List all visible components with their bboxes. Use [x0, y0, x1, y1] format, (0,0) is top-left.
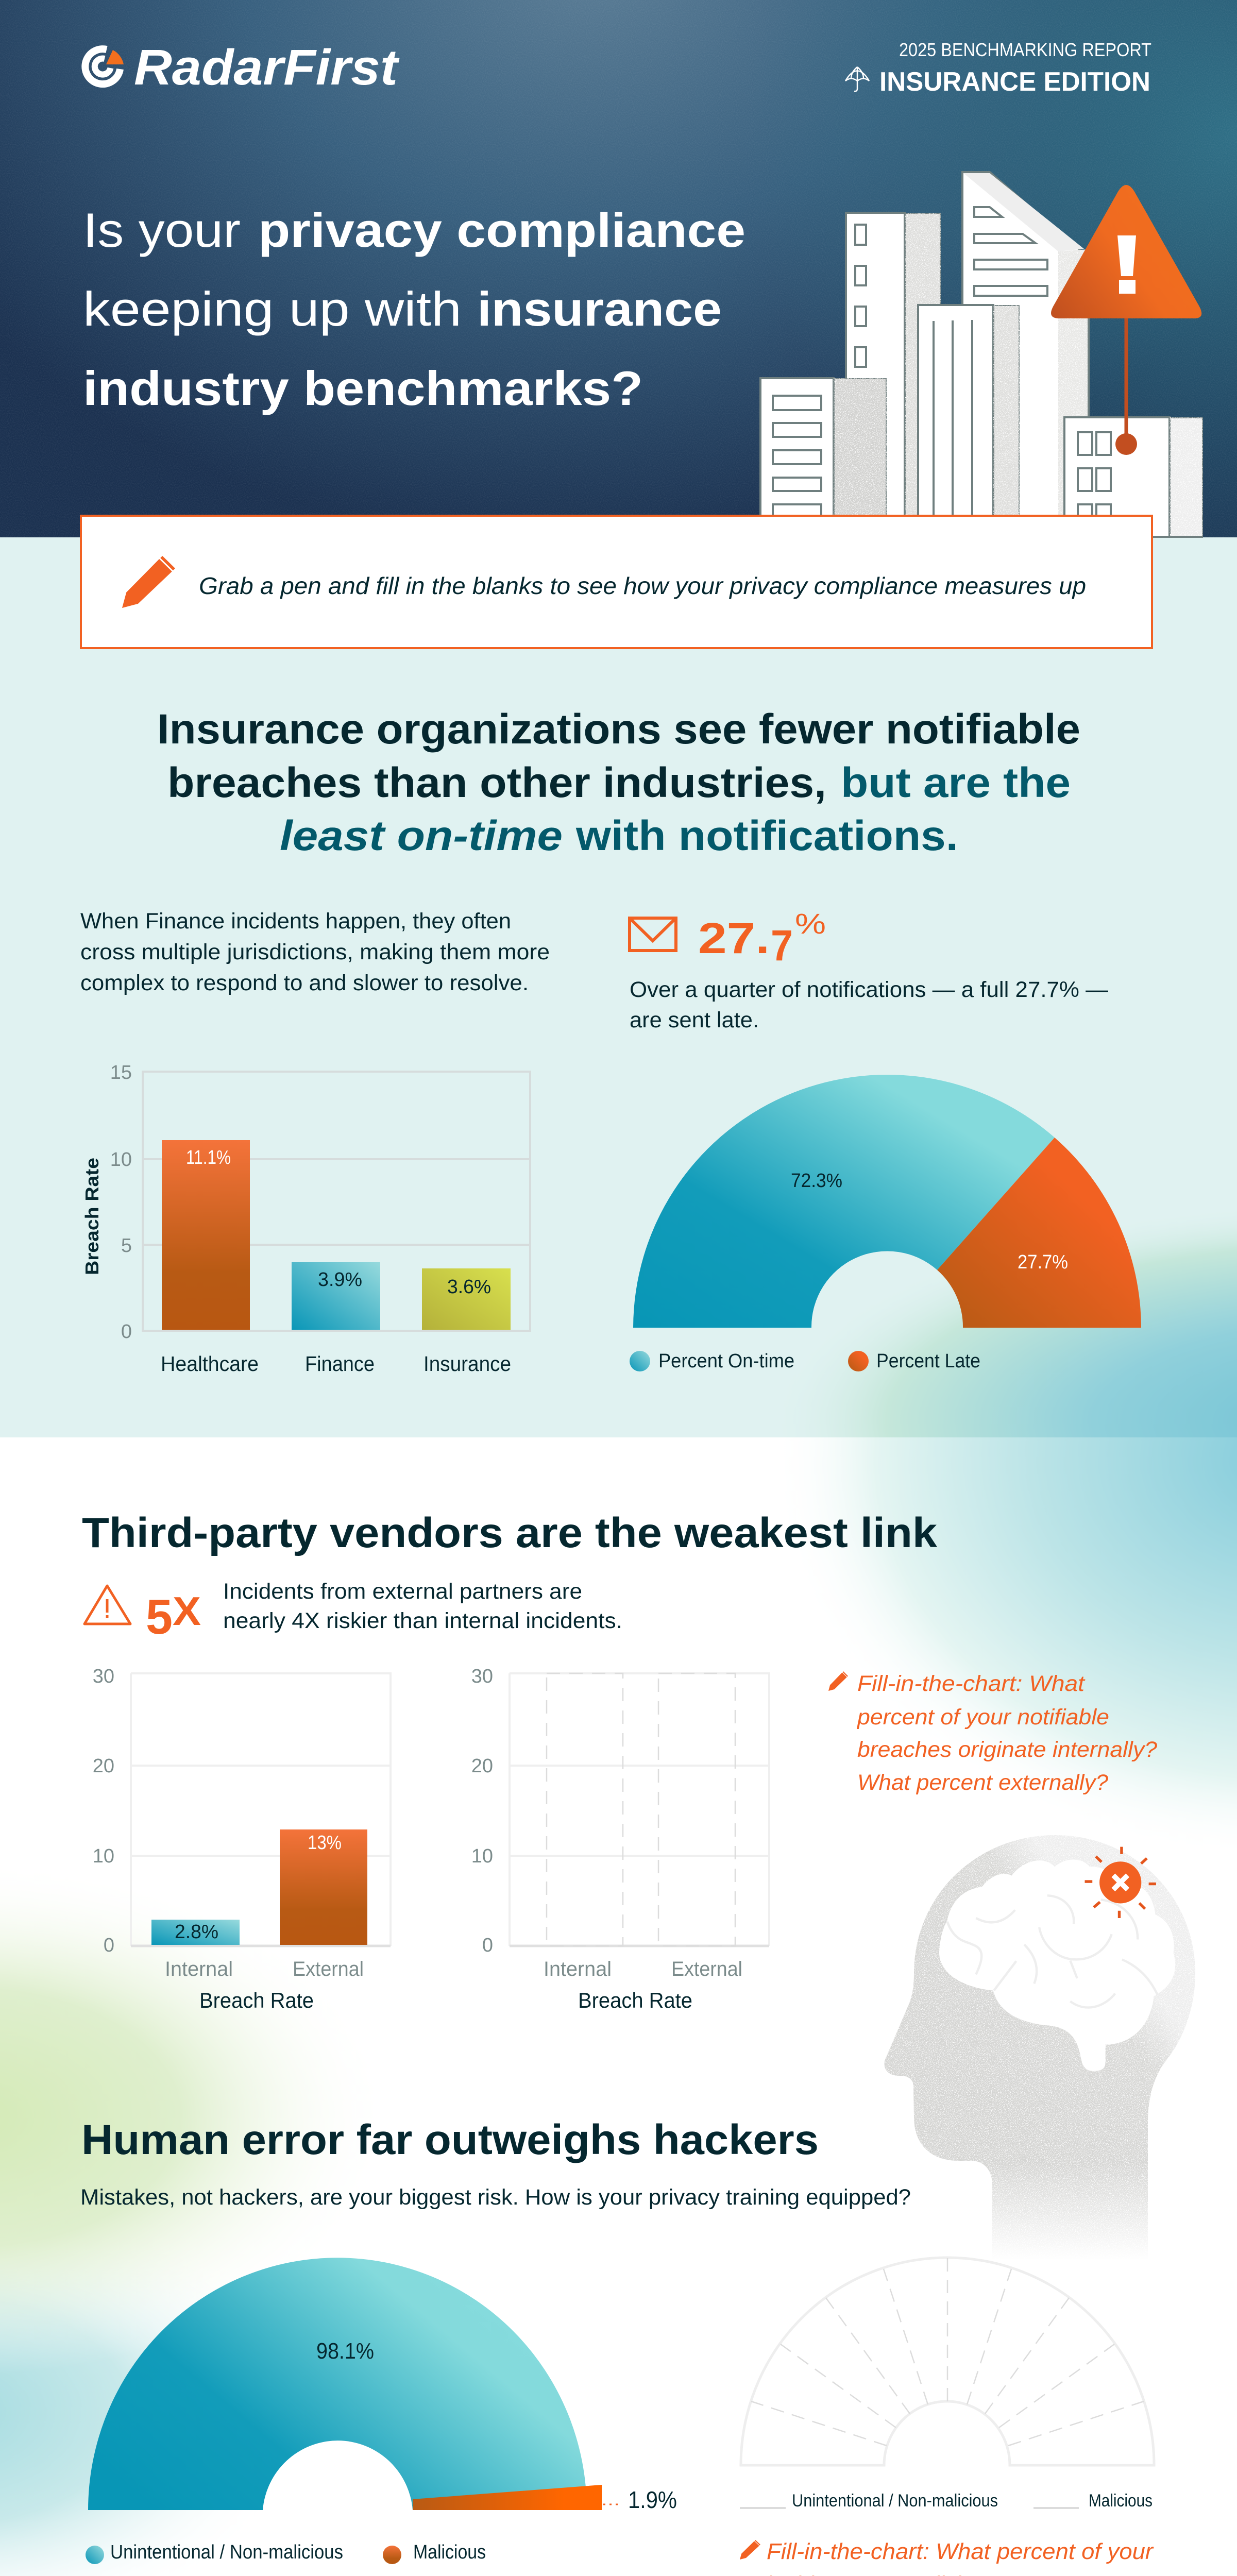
- icon: warning sign: [1051, 185, 1201, 455]
- heading: insurance organizations: with notifications.: [575, 812, 958, 859]
- blank gauge chart: fill in: [741, 2258, 1154, 2465]
- bar chart: breach rate by industry: [81, 1062, 530, 1376]
- building: angled tower: [962, 172, 1089, 537]
- bar: insurance: [422, 1268, 511, 1376]
- segment: on-time: [633, 1075, 1055, 1328]
- text block: external partners: nearly 4X riskier than internal incidents.: [223, 1608, 622, 1633]
- callout: grab a pen: [81, 516, 1152, 648]
- legend: percent on-time: Percent On-time: [658, 1350, 794, 1372]
- report label: INSURANCE EDITION: [879, 67, 1150, 97]
- callout: fill-in-the-chart vendors: breaches originate internally?: [857, 1737, 1157, 1762]
- bar: external: 13%: [308, 1832, 342, 1854]
- bar: healthcare: Healthcare: [161, 1352, 259, 1376]
- legend: malicious: [383, 2541, 486, 2564]
- blank bar chart: fill in: External: [671, 1958, 742, 1980]
- title: [83, 203, 745, 415]
- text block: late notifications: [630, 977, 1108, 1032]
- stat: 27.7%: 27.: [698, 914, 770, 962]
- icon: envelope: [630, 918, 676, 951]
- bar: healthcare: 11.1%: [186, 1147, 231, 1168]
- blank bar chart: fill in: 0: [482, 1935, 493, 1956]
- bar: finance: Finance: [305, 1352, 375, 1376]
- building: tall left: [846, 213, 941, 537]
- heading: insurance organizations: Insurance organizations see fewer notifiable: [157, 706, 1080, 753]
- legend: unintentional: Unintentional / Non-malicious: [110, 2541, 343, 2563]
- icon: error badge: [1085, 1847, 1156, 1918]
- segment: unintentional: [88, 2258, 587, 2510]
- stat: 5X: X: [173, 1588, 201, 1634]
- heading: insurance organizations: but are the: [841, 759, 1071, 806]
- bar: external: [280, 1829, 367, 1945]
- text block: external partners: Incidents from external partners are: [223, 1579, 582, 1604]
- title: keeping up with: [83, 282, 462, 336]
- icon: head with brain: [884, 1835, 1195, 2260]
- bar: internal: 2.8%: [175, 1921, 218, 1943]
- heading: insurance organizations: least on-time: [280, 812, 563, 859]
- stat: 27.7%: %: [795, 907, 826, 940]
- bar chart: breach rate by industry: 0: [121, 1321, 132, 1343]
- segment: malicious: [413, 2485, 602, 2510]
- blank bar chart: fill in: 20: [471, 1755, 493, 1777]
- icon: umbrella: [845, 67, 869, 91]
- bar: insurance: Insurance: [423, 1352, 511, 1376]
- blank bar chart: fill in: 30: [471, 1666, 493, 1687]
- report label: [879, 39, 1151, 97]
- blank bar chart: fill in: Internal: [544, 1958, 612, 1980]
- bar chart: breach rate internal vs external: 20: [93, 1755, 114, 1777]
- building: right: [1064, 417, 1203, 537]
- text block: finance incidents: [80, 909, 550, 995]
- segment: on-time: 72.3%: [791, 1170, 842, 1192]
- building: front left: [760, 378, 887, 537]
- bar chart: breach rate internal vs external: External: [293, 1958, 364, 1980]
- blank bar chart: fill in: 10: [471, 1845, 493, 1867]
- text block: late notifications: Over a quarter of notifications — a full 27.7% —: [630, 977, 1108, 1002]
- building: middle: [918, 305, 1020, 537]
- bar: finance: 3.9%: [318, 1269, 362, 1291]
- legend: malicious: Malicious: [413, 2541, 486, 2563]
- blank bar chart: fill in: [471, 1666, 769, 2012]
- legend: percent late: Percent Late: [876, 1350, 980, 1372]
- section background: breach stats: [0, 537, 1237, 1437]
- label: 1.9%: 1.9%: [628, 2486, 677, 2513]
- building base line: [1153, 536, 1203, 538]
- title: industry benchmarks?: [83, 361, 643, 415]
- icon: pen: [122, 556, 175, 608]
- bar chart: breach rate by industry: 15: [110, 1062, 132, 1083]
- bar: finance: [292, 1262, 380, 1376]
- title: insurance: [477, 282, 722, 336]
- bar chart: breach rate by industry: 5: [121, 1235, 132, 1257]
- logo: RadarFirst: RadarFirst: [134, 39, 400, 95]
- callout: fill-in-the-chart vendors: percent of your notifiable: [856, 1705, 1109, 1730]
- gauge chart: notification timeliness: [633, 1075, 1141, 1328]
- callout: fill-in-the-chart vendors: What percent externally?: [857, 1770, 1108, 1795]
- heading: insurance organizations: [157, 706, 1080, 859]
- callout: fill-in-the-chart malicious: [740, 2539, 1154, 2576]
- text block: finance incidents: When Finance incidents happen, they often: [80, 909, 511, 934]
- bar chart: breach rate internal vs external: 0: [104, 1935, 114, 1956]
- text block: finance incidents: cross multiple jurisdictions, making them more: [80, 940, 550, 964]
- text block: late notifications: are sent late.: [630, 1008, 759, 1032]
- segment: late: 27.7%: [1018, 1251, 1068, 1273]
- icon: warning triangle: [84, 1586, 130, 1624]
- text block: mistakes not hackers: Mistakes, not hackers, are your biggest risk. How is your privacy training equipped?: [80, 2185, 911, 2210]
- legend: blank gauge: [740, 2491, 1153, 2511]
- title: privacy compliance: [258, 203, 745, 257]
- title: Is your: [83, 203, 241, 257]
- legend: blank gauge: Unintentional / Non-malicious: [792, 2491, 998, 2511]
- callout: fill-in-the-chart vendors: [828, 1671, 1157, 1795]
- stat: 5X: 5: [146, 1589, 173, 1645]
- white section gradients: [0, 1437, 1237, 2576]
- stat: 27.7%: [698, 907, 826, 970]
- bar chart: breach rate internal vs external: 30: [93, 1666, 114, 1687]
- blank bar chart: fill in: Breach Rate: [578, 1988, 692, 2012]
- segment: unintentional: 98.1%: [316, 2338, 374, 2364]
- bar chart: breach rate internal vs external: 10: [93, 1845, 114, 1867]
- bar chart: breach rate internal vs external: Internal: [165, 1958, 233, 1980]
- report label: 2025 BENCHMARKING REPORT: [899, 39, 1151, 60]
- callout: grab a pen: Grab a pen and fill in the blanks to see how your privacy compliance measures up: [199, 572, 1086, 599]
- bar chart: breach rate by industry: Breach Rate: [81, 1158, 103, 1275]
- bar chart: breach rate by industry: 10: [110, 1149, 132, 1171]
- stat: 27.7%: 7: [771, 921, 793, 970]
- callout: fill-in-the-chart vendors: Fill-in-the-chart: What: [857, 1671, 1086, 1696]
- callout: fill-in-the-chart malicious: Fill-in-the-chart: What percent of your: [767, 2539, 1154, 2564]
- bar chart: breach rate internal vs external: [93, 1666, 391, 2012]
- text block: finance incidents: complex to respond to and slower to resolve.: [80, 971, 529, 995]
- bar: healthcare: [161, 1140, 259, 1376]
- heading: third-party vendors: Third-party vendors are the weakest link: [82, 1510, 937, 1556]
- bar: internal: [151, 1920, 240, 1945]
- text block: external partners: [223, 1579, 622, 1633]
- illustration: city buildings: [760, 172, 1203, 537]
- heading: human error: Human error far outweighs hackers: [81, 2116, 819, 2163]
- bar chart: breach rate internal vs external: Breach Rate: [199, 1988, 314, 2012]
- heading: insurance organizations: breaches than other industries,: [167, 759, 826, 806]
- segment: late: [937, 1138, 1141, 1328]
- stat: 5X: [146, 1588, 201, 1645]
- gauge chart: human error: [88, 2258, 677, 2513]
- header background: [0, 0, 1237, 537]
- bar: insurance: 3.6%: [447, 1276, 491, 1298]
- legend: blank gauge: Malicious: [1089, 2491, 1153, 2511]
